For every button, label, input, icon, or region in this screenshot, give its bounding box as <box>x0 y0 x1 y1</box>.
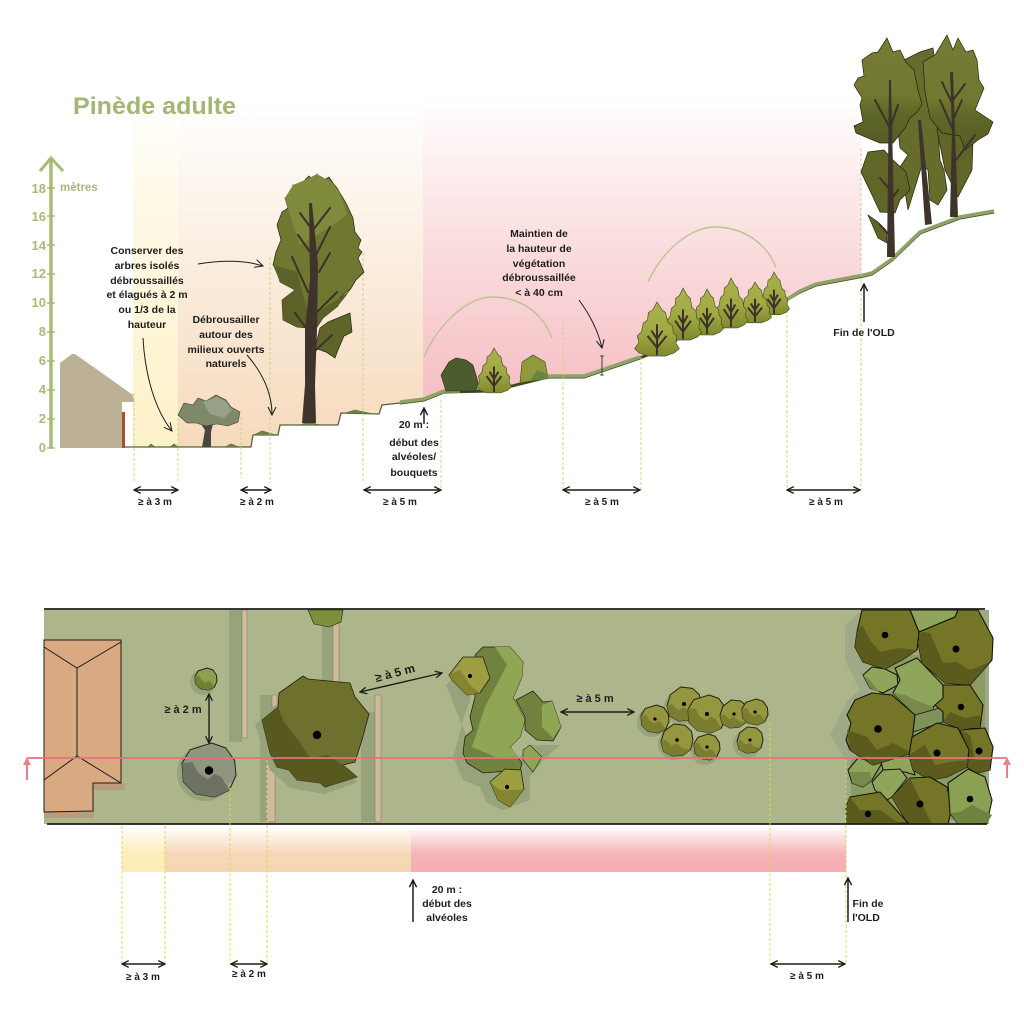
cotes du plan: ≥ à 5 m <box>374 661 416 685</box>
annotation: conserver des arbres isolés: Conserver des <box>111 245 184 257</box>
axe vertical en mètres: 12 <box>32 266 46 281</box>
axe vertical en mètres: 10 <box>32 295 46 310</box>
annotation: 20 m début des alvéoles plan: alvéoles <box>426 912 468 924</box>
icon: petit arbuste <box>190 668 217 695</box>
annotation: 20 m début des alvéoles: 20 m : <box>399 419 429 431</box>
annotation: débroussailler autour des milieux <box>187 314 265 370</box>
annotation: débroussailler autour des milieux: autour des <box>199 329 253 341</box>
annotation: conserver des arbres isolés: ou 1/3 de la <box>118 304 176 316</box>
annotation: maintien de la hauteur: Maintien de <box>510 228 568 240</box>
annotation: 20 m début des alvéoles plan: 20 m : <box>432 884 462 896</box>
cotes du profil: ≥ à 5 m <box>809 497 843 508</box>
icon: olivier en plan <box>177 743 236 801</box>
cotes sous le plan: ≥ à 3 m <box>126 972 160 983</box>
cotes sous le plan: ≥ à 5 m <box>790 971 824 982</box>
annotation: 20 m début des alvéoles: alvéoles/ <box>392 451 436 463</box>
annotation: 20 m début des alvéoles plan <box>413 880 472 924</box>
annotation: débroussailler autour des milieux: naturels <box>206 358 247 370</box>
axe vertical en mètres: 6 <box>39 353 46 368</box>
bande de zones sous le plan <box>122 826 846 872</box>
arc : jeunes pins <box>648 227 776 282</box>
flèches annotations profil <box>143 261 864 431</box>
axe vertical en mètres: 4 <box>39 382 47 397</box>
annotation: fin de l'OLD plan <box>848 878 884 924</box>
bosquet : alvéole basse <box>441 348 549 393</box>
annotation: maintien de la hauteur <box>502 228 576 299</box>
icon: arbre haut coupé <box>308 610 343 627</box>
icon: grand pin isolé <box>273 174 364 423</box>
icon: toiture maison <box>44 640 125 818</box>
annotation: 20 m début des alvéoles plan: début des <box>422 898 472 910</box>
arbres sombres <box>846 610 993 824</box>
ligne de sol droite végétalisée <box>400 211 994 403</box>
axe vertical en mètres: 2 <box>39 411 46 426</box>
cotes du profil: ≥ à 5 m <box>585 497 619 508</box>
zone: bande pêche <box>178 100 423 452</box>
annotation: 20 m début des alvéoles <box>389 419 439 479</box>
annotation: maintien de la hauteur: la hauteur de <box>506 243 572 255</box>
panel: vue en plan <box>23 609 1011 824</box>
terrain sous le sol <box>125 211 998 530</box>
annotation: 20 m début des alvéoles: début des <box>389 437 439 449</box>
bosquet : jeunes pins <box>635 272 790 356</box>
annotation: fin de l'OLD plan: Fin de <box>853 898 884 910</box>
cotes du plan <box>164 661 634 743</box>
axe vertical en mètres: mètres <box>60 182 98 194</box>
annotation: maintien de la hauteur: débroussaillée <box>502 272 576 284</box>
ligne de coupe rouge <box>23 757 1011 780</box>
repères pointillés du plan <box>122 723 846 965</box>
cotes du profil: ≥ à 3 m <box>138 497 172 508</box>
ligne de sol gauche <box>125 403 400 447</box>
annotation: fin de l'OLD profil: Fin de l'OLD <box>833 327 895 339</box>
axe vertical en mètres: 0 <box>39 440 46 455</box>
axe vertical en mètres: 18 <box>32 181 46 196</box>
axe vertical en mètres: 8 <box>39 324 46 339</box>
pinède dense en plan <box>830 610 993 824</box>
annotation: conserver des arbres isolés: arbres isolés <box>115 260 180 272</box>
zone: bande jaune 3 m <box>133 100 178 452</box>
annotation: maintien de la hauteur: < à 40 cm <box>515 287 563 299</box>
cotes du profil <box>134 490 860 508</box>
axe vertical en mètres: 14 <box>32 238 47 253</box>
fond du plan <box>44 610 989 824</box>
arbres clairs <box>848 610 958 800</box>
touffes et rochers <box>148 410 369 447</box>
haies : bandes et ombres <box>229 610 381 822</box>
repères pointillés de profil <box>134 148 861 490</box>
icon: maison en coupe <box>60 354 134 448</box>
axe vertical en mètres: 16 <box>32 209 46 224</box>
annotation: conserver des arbres isolés <box>106 245 188 331</box>
cotes du plan: ≥ à 5 m <box>576 693 614 705</box>
annotation: fin de l'OLD plan: l'OLD <box>852 912 880 924</box>
sous-bois entre les arbres <box>850 655 985 820</box>
icon: grand pin en plan <box>255 676 369 794</box>
zone: bande rose alvéoles <box>423 95 861 400</box>
panel: coupe de profil <box>125 95 998 530</box>
axe vertical en mètres <box>32 158 98 455</box>
annotation: conserver des arbres isolés: hauteur <box>128 319 166 331</box>
alvéole 2 en plan <box>637 687 768 765</box>
annotation: maintien de la hauteur: végétation <box>513 258 565 270</box>
title: Pinède adulte <box>73 93 236 120</box>
cotes sous le plan: ≥ à 2 m <box>232 969 266 980</box>
annotation: débroussailler autour des milieux: Débrousailler <box>192 314 260 326</box>
cotes du profil: ≥ à 2 m <box>240 497 274 508</box>
cotes du plan: ≥ à 2 m <box>164 704 202 716</box>
icon: pinède adulte en bout de coupe <box>854 35 993 257</box>
alvéole 1 en plan <box>446 647 561 810</box>
cotes sous le plan <box>122 964 845 983</box>
annotation: conserver des arbres isolés: et élagués à 2 m <box>106 289 188 301</box>
bords haut et bas du plan <box>44 609 987 824</box>
icon: olivier <box>178 395 240 447</box>
annotation: débroussailler autour des milieux: milieux ouverts <box>187 344 265 356</box>
annotation: 20 m début des alvéoles: bouquets <box>390 467 438 479</box>
arc : alvéole basse <box>424 297 552 357</box>
annotation: conserver des arbres isolés: débroussaillés <box>110 275 184 287</box>
ombre de la pinède <box>830 610 989 824</box>
cotes du profil: ≥ à 5 m <box>383 497 417 508</box>
